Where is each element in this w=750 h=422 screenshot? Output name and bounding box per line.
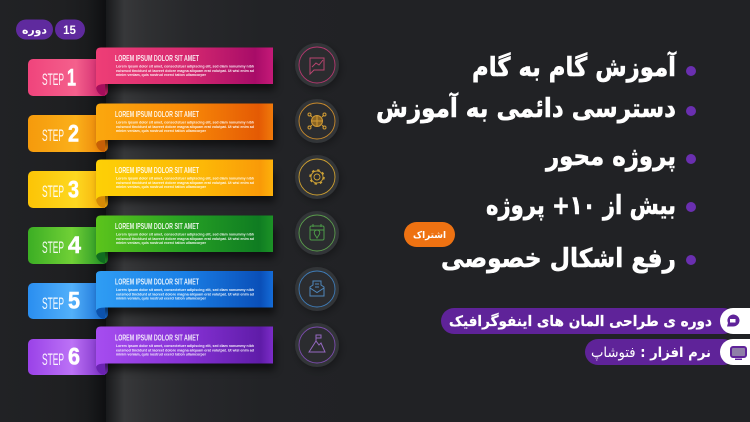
- step 4 icon: calendar pin: [295, 211, 339, 255]
- step 3: [28, 155, 339, 208]
- step 4: [28, 211, 339, 264]
- step 5 tag: [28, 283, 108, 319]
- step 5: [28, 267, 339, 319]
- step 6 ribbon: euismod tincidunt ut laoreet dolore magna aliquam erat volutpat. Ut wisi enim ad: [116, 348, 254, 352]
- step 2: [28, 99, 339, 152]
- step 3 ribbon: LOREM IPSUM DOLOR SIT AMET: [115, 165, 199, 175]
- step 1 ribbon: minim veniam, quis nostrud exerci tation ullamcorper: [116, 73, 207, 77]
- step 1 icon: chart speech bubble: [295, 43, 339, 87]
- step 3 icon: gear: [295, 155, 339, 199]
- step 1 ribbon: Lorem ipsum dolor sit amet, consectetuer adipiscing elit, sed diam nonummy nibh: [116, 64, 254, 68]
- step 1 tag: 1: [67, 64, 76, 92]
- step 3 ribbon: minim veniam, quis nostrud exerci tation ullamcorper: [116, 185, 207, 189]
- step 1 tag: [28, 59, 108, 96]
- subscription badge: اشتراک: [413, 230, 446, 241]
- step 2 ribbon: LOREM IPSUM DOLOR SIT AMET: [115, 109, 199, 119]
- step 2 tag: STEP: [42, 127, 64, 145]
- step 1 tag: STEP: [42, 71, 64, 89]
- step 2 ribbon: [96, 104, 275, 152]
- step 2 tag: 2: [68, 120, 79, 148]
- step 4 ribbon: LOREM IPSUM DOLOR SIT AMET: [115, 221, 199, 231]
- course title bar: [441, 308, 750, 334]
- step 4 tag: 4: [68, 232, 82, 259]
- step 4 tag: STEP: [42, 239, 64, 257]
- step 3 ribbon: Lorem ipsum dolor sit amet, consectetuer adipiscing elit, sed diam nonummy nibh: [116, 176, 254, 180]
- step 6 ribbon: minim veniam, quis nostrud exerci tation ullamcorper: [116, 353, 207, 357]
- step 1 ribbon: [96, 48, 275, 96]
- software bar: نرم افزار : فتوشاپ: [591, 345, 711, 361]
- step 5 tag: 5: [68, 288, 80, 314]
- step 3 tag: [28, 171, 108, 208]
- course title bar: دوره ی طراحی المان های اینفوگرافیک: [449, 312, 712, 330]
- badge: course count: دوره: [22, 24, 47, 36]
- subscription badge: [404, 222, 455, 247]
- step 2 ribbon: minim veniam, quis nostrud exerci tation ullamcorper: [116, 129, 207, 133]
- badge: course count: 15: [63, 25, 76, 37]
- step 5 icon: open mail: [295, 267, 339, 311]
- step 4 ribbon: [96, 216, 275, 263]
- step 5 ribbon: minim veniam, quis nostrud exerci tation ullamcorper: [116, 297, 207, 301]
- step 6 ribbon: LOREM IPSUM DOLOR SIT AMET: [115, 332, 199, 342]
- badge: course count: [16, 20, 85, 40]
- central shaded panel: [106, 0, 366, 422]
- left dark column: [0, 0, 106, 422]
- step 6 icon: mountain flag: [295, 323, 339, 367]
- step 1 ribbon: LOREM IPSUM DOLOR SIT AMET: [115, 53, 199, 63]
- step 5 ribbon: euismod tincidunt ut laoreet dolore magna aliquam erat volutpat. Ut wisi enim ad: [116, 292, 254, 296]
- step 6 tag: 6: [68, 344, 80, 370]
- step 4 ribbon: euismod tincidunt ut laoreet dolore magna aliquam erat volutpat. Ut wisi enim ad: [116, 237, 254, 241]
- step 4 ribbon: Lorem ipsum dolor sit amet, consectetuer adipiscing elit, sed diam nonummy nibh: [116, 232, 254, 236]
- step 6: [28, 323, 339, 375]
- step 3 ribbon: [96, 160, 275, 208]
- step 6 tag: [28, 339, 108, 375]
- step 6 ribbon: Lorem ipsum dolor sit amet, consectetuer adipiscing elit, sed diam nonummy nibh: [116, 344, 254, 348]
- feature 3: پروژه محور: [544, 142, 676, 172]
- step 6 tag: STEP: [42, 351, 64, 369]
- step 1 ribbon: euismod tincidunt ut laoreet dolore magna aliquam erat volutpat. Ut wisi enim ad: [116, 69, 254, 73]
- feature list: [376, 51, 696, 274]
- icon: video chat: [720, 308, 750, 334]
- step 2 ribbon: Lorem ipsum dolor sit amet, consectetuer adipiscing elit, sed diam nonummy nibh: [116, 120, 254, 124]
- step 2 icon: network globe: [295, 99, 339, 143]
- icon: monitor: [720, 339, 750, 365]
- step 3 tag: 3: [68, 176, 79, 204]
- step 5 ribbon: Lorem ipsum dolor sit amet, consectetuer adipiscing elit, sed diam nonummy nibh: [116, 288, 254, 292]
- step 2 ribbon: euismod tincidunt ut laoreet dolore magna aliquam erat volutpat. Ut wisi enim ad: [116, 125, 254, 129]
- step 1: [28, 43, 339, 96]
- step 2 tag: [28, 115, 108, 152]
- step 5 ribbon: LOREM IPSUM DOLOR SIT AMET: [115, 276, 199, 286]
- feature 1: آموزش گام به گام: [472, 51, 677, 83]
- step 5 ribbon: [96, 271, 275, 319]
- feature 5: رفع اشکال خصوصی: [441, 244, 676, 274]
- step 6 ribbon: [96, 326, 275, 375]
- step 3 tag: STEP: [42, 183, 64, 201]
- feature 4: بیش از ۱۰+ پروژه: [486, 191, 676, 221]
- feature 2: دسترسی دائمی به آموزش: [376, 92, 676, 124]
- software bar: [585, 339, 750, 365]
- step 4 tag: [28, 227, 108, 264]
- step 4 ribbon: minim veniam, quis nostrud exerci tation ullamcorper: [116, 241, 207, 245]
- step 5 tag: STEP: [42, 295, 64, 313]
- step 3 ribbon: euismod tincidunt ut laoreet dolore magna aliquam erat volutpat. Ut wisi enim ad: [116, 181, 254, 185]
